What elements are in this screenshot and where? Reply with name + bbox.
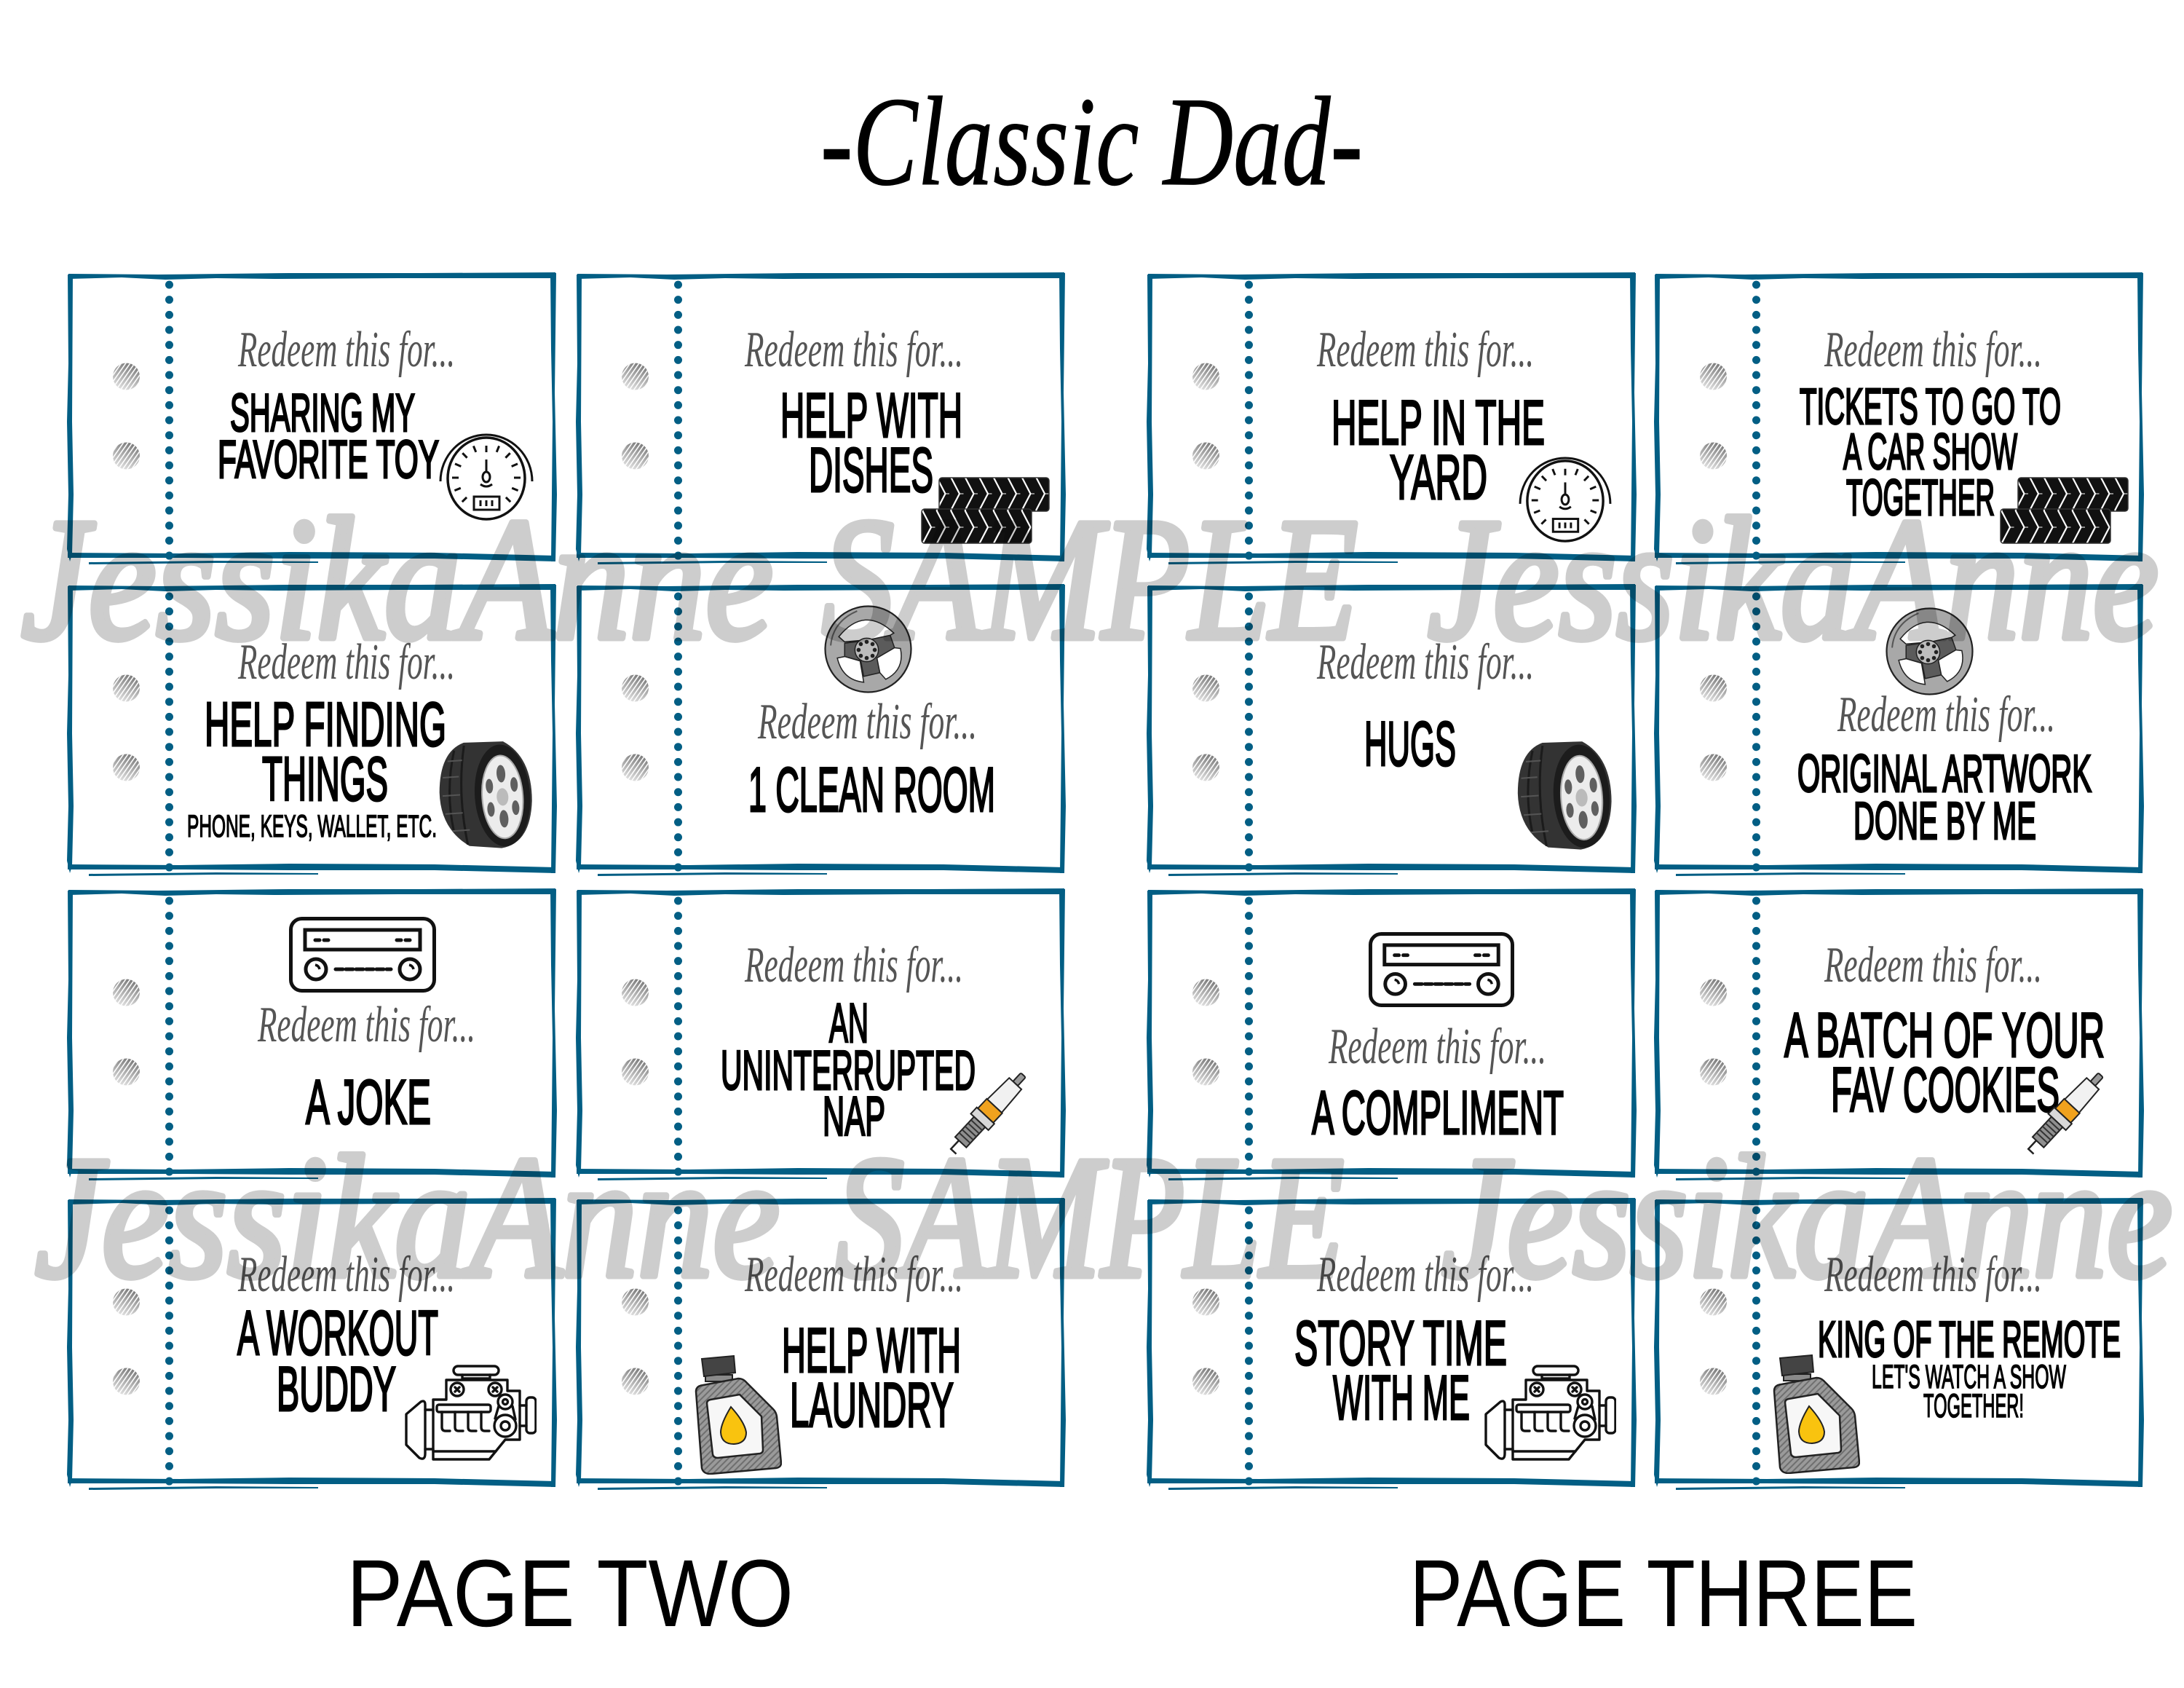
- reward text: UNINTERRUPTED: [721, 1040, 976, 1102]
- card: help with dishes: [576, 272, 1066, 564]
- reward text: 1 CLEAN ROOM: [748, 755, 995, 825]
- icon: spark plug: [2022, 1067, 2110, 1159]
- icon: engine: [406, 1366, 536, 1459]
- reward text: HELP IN THE: [1332, 388, 1545, 458]
- watermark: bottom row: SAMPLE: [836, 1120, 1344, 1314]
- reward text: LAUNDRY: [790, 1370, 954, 1440]
- card: tickets to a car show: [1654, 272, 2144, 564]
- icon: steering wheel: [826, 607, 911, 692]
- label: redeem this for: Redeem this for...: [1328, 1019, 1546, 1075]
- reward text: FAVORITE TOY: [218, 430, 439, 489]
- label: redeem this for: Redeem this for...: [1316, 1247, 1534, 1303]
- reward text: AN: [829, 993, 869, 1054]
- reward text: [780, 381, 962, 505]
- label: redeem this for: Redeem this for...: [744, 1247, 963, 1303]
- label: redeem this for: Redeem this for...: [744, 322, 963, 378]
- card: original artwork: [1654, 584, 2144, 876]
- reward text: STORY TIME: [1294, 1309, 1507, 1379]
- reward text: TOGETHER!: [1923, 1387, 2024, 1424]
- icon: speedometer: [1520, 458, 1610, 541]
- reward text: A COMPLIMENT: [1312, 1078, 1564, 1147]
- card: sharing my favorite toy: [67, 272, 557, 564]
- card: story time with me: [1147, 1198, 1637, 1490]
- reward text: DONE BY ME: [1853, 792, 2036, 851]
- reward text: [1797, 745, 2092, 851]
- title: -Classic Dad-: [820, 71, 1363, 212]
- icon: oil bottle: [1774, 1355, 1859, 1473]
- card: help with laundry: [576, 1198, 1066, 1490]
- reward text: [237, 1298, 438, 1424]
- label: redeem this for: Redeem this for...: [1824, 937, 2042, 993]
- icon: spark plug: [944, 1067, 1032, 1159]
- caption: page three: PAGE THREE: [1409, 1539, 1918, 1646]
- icon: oil bottle: [696, 1356, 781, 1474]
- reward text: BUDDY: [277, 1354, 396, 1424]
- label: redeem this for: Redeem this for...: [757, 694, 977, 750]
- icon: car radio: [1370, 934, 1513, 1006]
- reward text: HELP FINDING: [205, 690, 446, 760]
- label: redeem this for: Redeem this for...: [1316, 322, 1534, 378]
- reward text: NAP: [823, 1086, 885, 1148]
- reward text: SHARING MY: [230, 384, 415, 443]
- icon: tire: [436, 738, 535, 852]
- reward text: [218, 384, 439, 489]
- icon: car radio: [291, 919, 434, 990]
- reward text: [1332, 388, 1545, 513]
- watermark: top row: SAMPLE: [822, 482, 1358, 676]
- label: redeem this for: Redeem this for...: [744, 937, 963, 993]
- reward text: A JOKE: [306, 1068, 431, 1137]
- watermark: bottom row: JessikaAnne: [35, 1120, 780, 1314]
- reward text: HELP WITH: [782, 1316, 961, 1386]
- reward text: TOGETHER: [1846, 469, 1995, 526]
- card: an uninterrupted nap: [576, 888, 1066, 1180]
- card: a batch of cookies: [1654, 888, 2144, 1180]
- reward text: A CAR SHOW: [1843, 423, 2017, 480]
- label: redeem this for: Redeem this for...: [1824, 322, 2042, 378]
- reward text: PHONE, KEYS, WALLET, ETC.: [187, 809, 437, 844]
- watermark: top row: [21, 482, 2159, 676]
- icon: stacked tires: [922, 478, 1049, 543]
- reward text: DISHES: [809, 435, 933, 505]
- label: redeem this for: Redeem this for...: [1824, 1247, 2042, 1303]
- reward text: HUGS: [1364, 709, 1456, 779]
- watermark: top row: JessikaAnne: [21, 482, 773, 676]
- reward text: [721, 993, 976, 1148]
- card: a compliment: [1147, 888, 1637, 1180]
- icon: engine: [1486, 1366, 1615, 1459]
- caption: page two: PAGE TWO: [347, 1539, 794, 1646]
- label: redeem this for: Redeem this for...: [237, 1247, 455, 1303]
- card: hugs: [1147, 584, 1637, 876]
- reward text: [1784, 1001, 2105, 1125]
- icon: steering wheel: [1887, 609, 1972, 694]
- icon: stacked tires: [2001, 478, 2128, 543]
- watermark: bottom row: [35, 1120, 2172, 1314]
- icon: speedometer: [440, 435, 532, 519]
- label: redeem this for: Redeem this for...: [1837, 687, 2055, 743]
- reward text: [187, 690, 446, 844]
- label: redeem this for: Redeem this for...: [237, 634, 455, 690]
- reward text: THINGS: [262, 745, 388, 814]
- card: a joke: [67, 888, 557, 1180]
- reward text: WITH ME: [1333, 1363, 1470, 1433]
- label: redeem this for: Redeem this for...: [257, 997, 475, 1053]
- reward text: [1818, 1311, 2121, 1424]
- card: help finding things: [67, 584, 557, 876]
- card: help in the yard: [1147, 272, 1637, 564]
- label: redeem this for: Redeem this for...: [237, 322, 455, 378]
- card: king of the remote: [1654, 1198, 2144, 1490]
- card: a workout buddy: [67, 1198, 557, 1490]
- icon: tire: [1514, 738, 1615, 853]
- reward text: [1800, 378, 2061, 526]
- label: redeem this for: Redeem this for...: [1316, 634, 1534, 690]
- reward text: HELP WITH: [780, 381, 962, 451]
- reward text: [1294, 1309, 1507, 1433]
- reward text: YARD: [1390, 443, 1487, 513]
- card: 1 clean room: [576, 584, 1066, 876]
- reward text: A WORKOUT: [237, 1298, 438, 1368]
- reward text: [782, 1316, 961, 1440]
